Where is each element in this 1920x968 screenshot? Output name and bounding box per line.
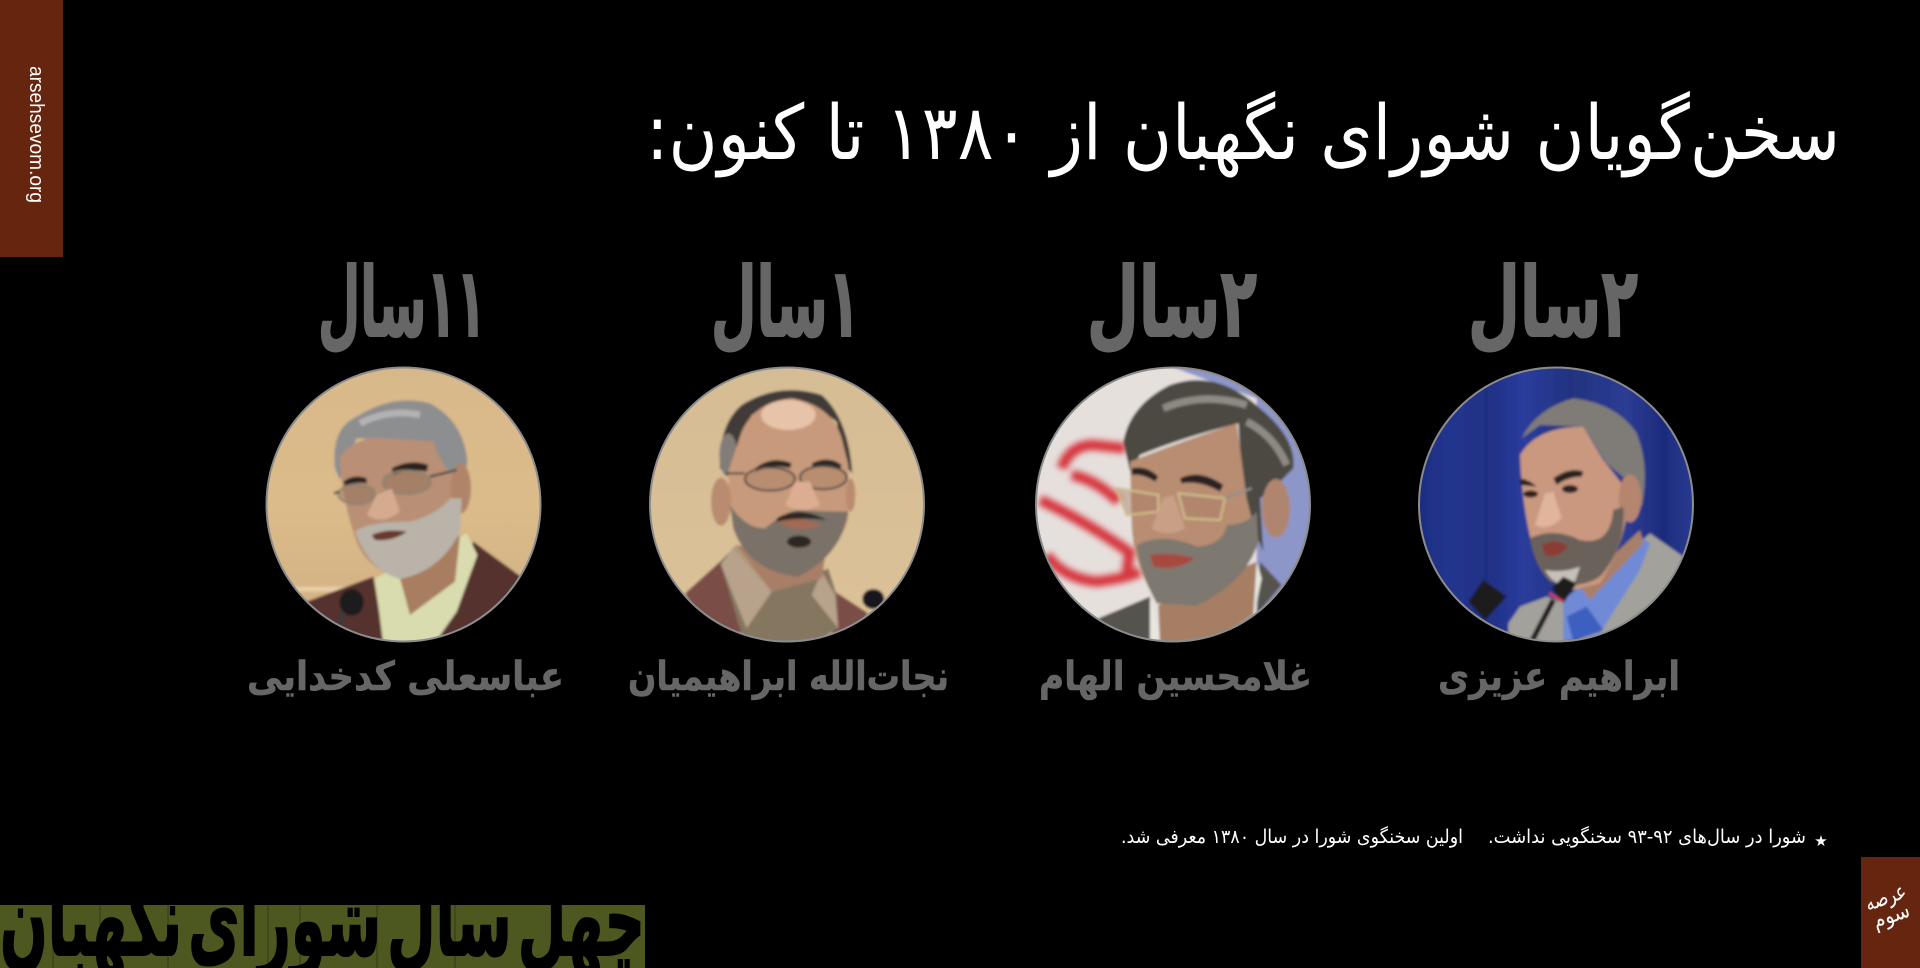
series banner	[0, 905, 645, 968]
portrait	[1417, 367, 1697, 643]
portrait	[1030, 365, 1317, 645]
name: ابراهیم عزیزی	[1438, 654, 1680, 700]
logo wordmark	[1862, 879, 1916, 935]
footnote	[1121, 825, 1828, 850]
years in office: ۲سال	[1468, 247, 1638, 359]
portrait	[260, 365, 547, 645]
footnote part two: اولین سخنگوی شورا در سال ۱۳۸۰ معرفی شد.	[1121, 825, 1463, 848]
panel: Nejatollah Ebrahimian	[628, 247, 949, 700]
years in office: ۱سال	[711, 247, 860, 359]
panel: Ebrahim Azizi	[1417, 247, 1697, 700]
panel: Gholamhossein Elham	[1030, 247, 1317, 700]
name: نجات‌الله ابراهیمیان	[628, 654, 949, 700]
name: غلامحسین الهام	[1039, 654, 1312, 700]
logo wordmark: سوم	[1869, 898, 1913, 934]
years in office: ۱۱سال	[318, 247, 486, 359]
years in office: ۲سال	[1087, 247, 1257, 359]
logo tab	[1861, 857, 1920, 968]
side tab: website: arsehsevom.org	[25, 66, 47, 203]
name: عباسعلی کدخدایی	[247, 654, 564, 700]
panel: Abbasali Kadkhodaei	[247, 247, 564, 700]
portrait	[645, 365, 932, 645]
title: سخن‌گویان شورای نگهبان از ۱۳۸۰ تا کنون:	[646, 88, 1840, 178]
footnote part one: شورا در سال‌های ۹۲-۹۳ سخنگویی نداشت.	[1488, 825, 1806, 848]
side tab: website	[0, 0, 63, 257]
footnote star: ★	[1814, 832, 1828, 850]
